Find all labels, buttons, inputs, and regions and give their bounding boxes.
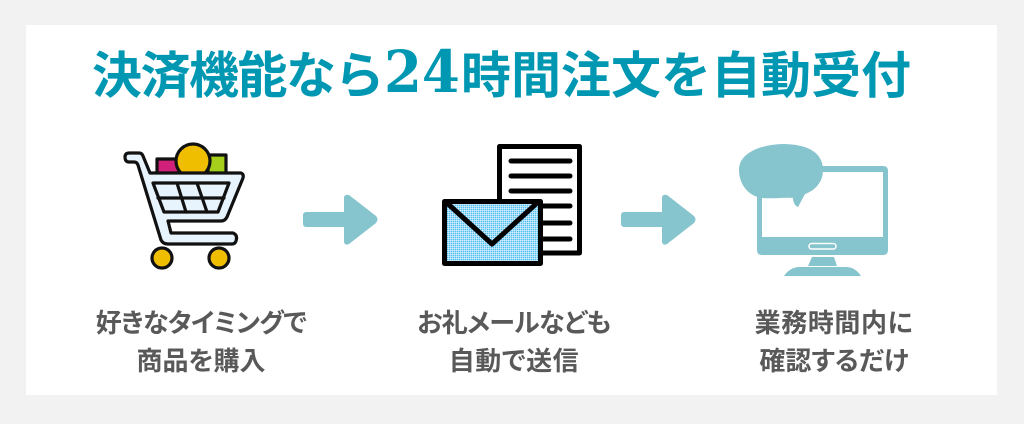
- caption: step 1: [96, 303, 306, 378]
- icon: envelope and document: [444, 146, 580, 264]
- caption: step 2: 自動で送信: [449, 341, 579, 378]
- caption: step 3: 確認するだけ: [759, 341, 909, 378]
- caption: step 3: 業務時間内に: [755, 303, 913, 340]
- icon: shopping cart: [125, 144, 243, 268]
- caption: step 1: 商品を購入: [137, 341, 265, 378]
- caption: step 3: [755, 303, 913, 378]
- caption: step 2: [417, 303, 611, 378]
- icon: monitor with speech bubble: [739, 144, 888, 276]
- caption: step 1: 好きなタイミングで: [96, 303, 306, 340]
- title: 24: [384, 38, 460, 106]
- title: 時間注文を自動受付: [461, 36, 911, 108]
- title: [92, 36, 911, 108]
- arrow: second step: [621, 195, 696, 245]
- caption: step 2: お礼メールなども: [417, 303, 611, 340]
- arrow: first step: [303, 195, 378, 245]
- title: 決済機能なら: [92, 36, 383, 108]
